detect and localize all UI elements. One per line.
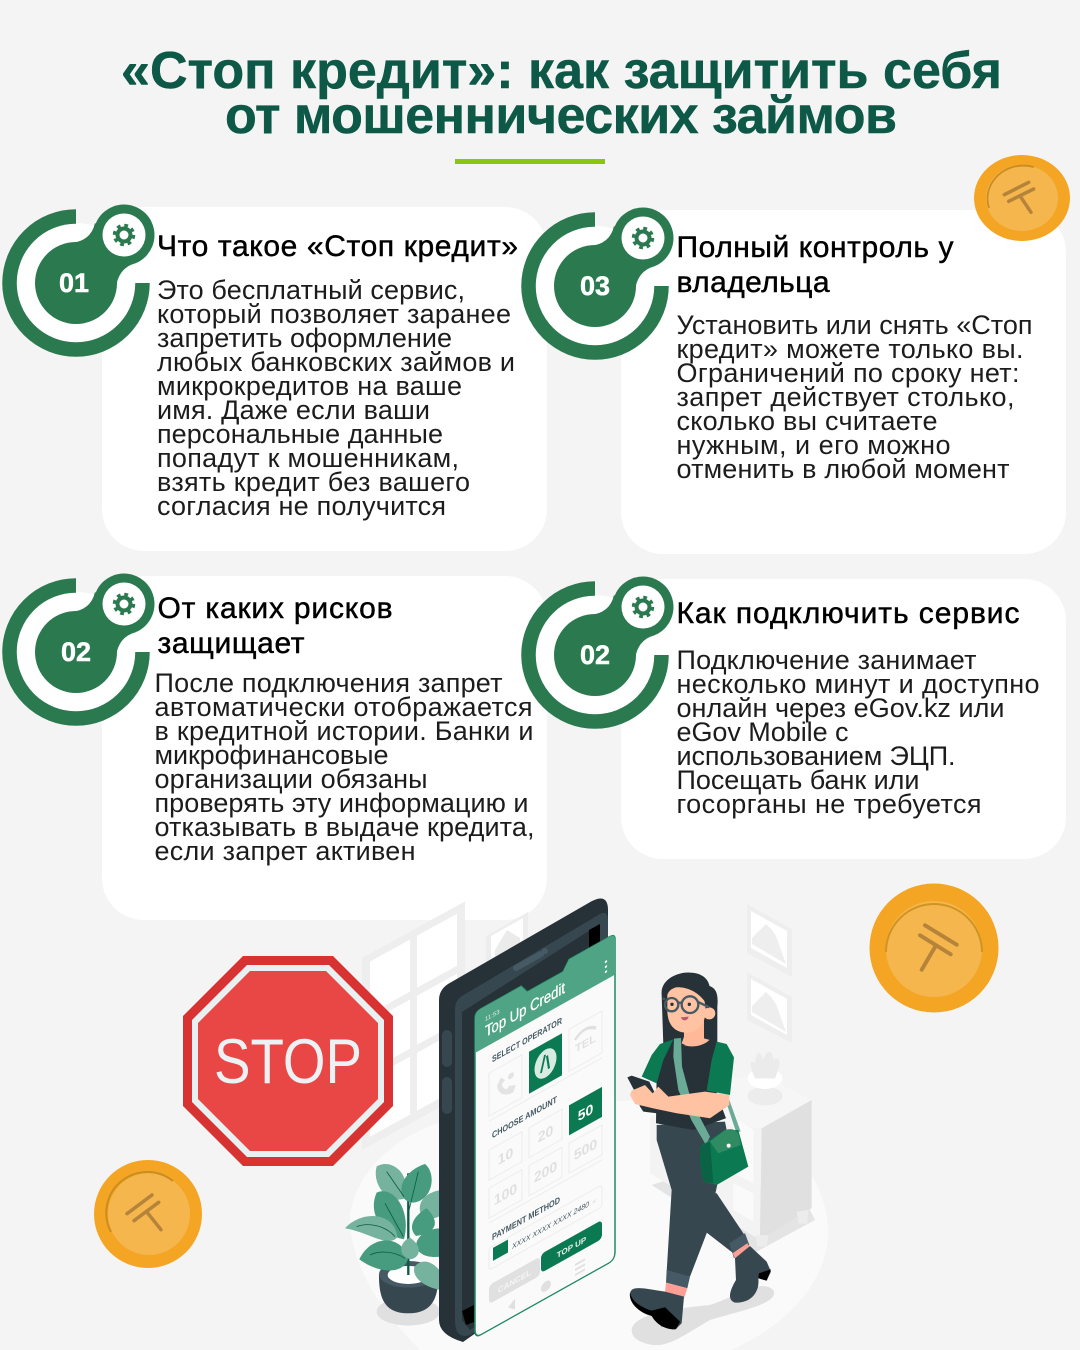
text block: what is Stop Credit: имя. Даже если ваши <box>157 395 430 425</box>
text block: what is Stop Credit: запретить оформление <box>157 323 452 353</box>
heading: which risks: защищает <box>158 627 305 660</box>
text block: which risks: в кредитной истории. Банки и <box>154 716 534 746</box>
button: top up: TOP UP <box>557 1234 586 1260</box>
potted plant <box>345 1164 442 1326</box>
strap <box>673 1038 710 1145</box>
text block: what is Stop Credit: персональные данные <box>157 419 443 449</box>
text block: how to connect <box>676 645 1040 819</box>
panel: how to connect <box>621 579 1066 859</box>
text block: what is Stop Credit <box>157 275 515 521</box>
select operator: TEL <box>575 1031 596 1056</box>
neck <box>682 1020 710 1046</box>
text block: how to connect: госорганы не требуется <box>676 789 982 819</box>
text block: what is Stop Credit: Это бесплатный сервис, <box>157 275 465 305</box>
badge: 02 right <box>528 576 674 722</box>
phone navigation <box>508 1258 585 1314</box>
badge: 01: 01 <box>59 268 89 298</box>
choose amount: 500 <box>574 1135 597 1164</box>
ground shadow <box>632 1286 774 1345</box>
select operator: SELECT OPERATOR <box>492 1016 562 1065</box>
text block: how to connect: использованием ЭЦП. <box>676 741 956 771</box>
text block: which risks: организации обязаны <box>154 764 428 794</box>
badge: 01 <box>10 204 154 350</box>
heading: full owner control: владельца <box>676 266 830 299</box>
heading: full owner control <box>676 231 954 299</box>
face <box>667 986 706 1033</box>
choose amount: 20 <box>538 1122 553 1147</box>
t-shirt <box>656 1039 726 1130</box>
select operator <box>489 993 602 1116</box>
icon: large tenge coin <box>870 884 998 1012</box>
text block: how to connect: несколько минут и доступно <box>676 669 1040 699</box>
phone screen title: Top Up Credit <box>485 978 565 1041</box>
badge: 02 left: 02 <box>61 637 91 667</box>
text block: full owner control: сколько вы считаете <box>676 406 938 436</box>
choose amount <box>489 1069 602 1218</box>
floor shape <box>350 1100 828 1350</box>
payment method <box>489 1171 602 1270</box>
button: top up <box>541 1220 602 1273</box>
title: от мошеннических займов <box>225 87 897 145</box>
heading: which risks <box>158 592 392 660</box>
near leg <box>657 1122 727 1277</box>
button: cancel <box>489 1257 540 1304</box>
phone status bar: 11:53 <box>485 1008 500 1023</box>
phone side buttons <box>442 1030 452 1067</box>
heading: which risks: От каких рисков <box>158 592 392 625</box>
stop sign <box>183 956 393 1166</box>
badge: 02 right: 02 <box>580 640 610 670</box>
panel: what is Stop Credit <box>102 207 547 551</box>
payment method: × <box>592 1195 597 1207</box>
near boot <box>630 1288 684 1328</box>
hair back <box>662 973 718 1045</box>
far leg and boot <box>703 1193 747 1253</box>
heading: full owner control: Полный контроль у <box>676 231 954 264</box>
cabinet with faded plant <box>650 1052 815 1252</box>
choose amount: 200 <box>534 1158 557 1187</box>
text block: what is Stop Credit: попадут к мошенникам, <box>157 443 459 473</box>
text block: full owner control: кредит» можете только вы. <box>676 334 1024 364</box>
title <box>121 42 1002 145</box>
text block: how to connect: Посещать банк или <box>676 765 920 795</box>
text block: which risks: автоматически отображается <box>154 692 532 722</box>
heading: what is Stop Credit: Что такое «Стоп кредит» <box>157 230 518 263</box>
badge: 03: 03 <box>580 271 610 301</box>
held phone <box>627 1076 657 1113</box>
text block: full owner control: Ограничений по сроку нет: <box>676 358 1020 388</box>
stop sign text: STOP <box>214 1027 362 1097</box>
text block: which risks: если запрет активен <box>154 836 416 866</box>
panel: which risks it protects from <box>102 576 547 920</box>
payment method: PAYMENT METHOD <box>492 1195 560 1243</box>
icon: small tenge coin <box>94 1160 202 1268</box>
badge: 02 left <box>10 574 154 718</box>
text block: what is Stop Credit: любых банковских займов и <box>157 347 515 377</box>
bag <box>700 1130 748 1185</box>
wall picture behind phone <box>486 912 528 974</box>
text block: how to connect: eGov Mobile с <box>676 717 848 747</box>
heading: how to connect: Как подключить сервис <box>676 597 1020 630</box>
text block: which risks: После подключения запрет <box>154 668 502 698</box>
window <box>362 901 465 1150</box>
arms and hand <box>630 1085 729 1118</box>
choose amount: 100 <box>494 1180 517 1209</box>
glasses <box>663 996 709 1013</box>
payment method: XXXX XXXX XXXX 2480 <box>511 1199 589 1252</box>
text block: full owner control: Установить или снять «Стоп <box>676 310 1032 340</box>
choose amount: 10 <box>498 1144 513 1169</box>
badge: 03 <box>528 208 674 352</box>
text block: which risks: отказывать в выдаче кредита, <box>154 812 534 842</box>
text block: which risks: микрофинансовые <box>154 740 388 770</box>
phone body <box>439 898 608 1342</box>
text block: full owner control: запрет действует столько, <box>676 382 1014 412</box>
phone <box>439 898 615 1342</box>
text block: what is Stop Credit: взять кредит без вашего <box>157 467 470 497</box>
text block: full owner control <box>676 310 1032 484</box>
text block: how to connect: онлайн через eGov.kz или <box>676 693 1004 723</box>
wall pictures right <box>747 904 792 1043</box>
text block: how to connect: Подключение занимает <box>676 645 976 675</box>
choose amount: CHOOSE AMOUNT <box>492 1095 557 1141</box>
text block: full owner control: отменить в любой момент <box>676 454 1010 484</box>
text block: what is Stop Credit: микрокредитов на ваше <box>157 371 462 401</box>
text block: what is Stop Credit: который позволяет заранее <box>157 299 511 329</box>
sleeves <box>642 1039 673 1083</box>
icon: tenge coin top right <box>974 155 1070 241</box>
text block: which risks: проверять эту информацию и <box>154 788 528 818</box>
choose amount: 50 <box>578 1101 593 1125</box>
panel: full owner control <box>621 210 1066 554</box>
woman walking with phone <box>627 973 774 1345</box>
text block: full owner control: нужным, и его можно <box>676 430 950 460</box>
phone screen <box>475 934 615 1338</box>
text block: which risks <box>154 668 534 866</box>
button: cancel: CANCEL <box>498 1267 531 1295</box>
text block: what is Stop Credit: согласия не получится <box>157 491 446 521</box>
title: «Стоп кредит»: как защитить себя <box>121 42 1002 100</box>
phone speaker <box>516 954 541 968</box>
